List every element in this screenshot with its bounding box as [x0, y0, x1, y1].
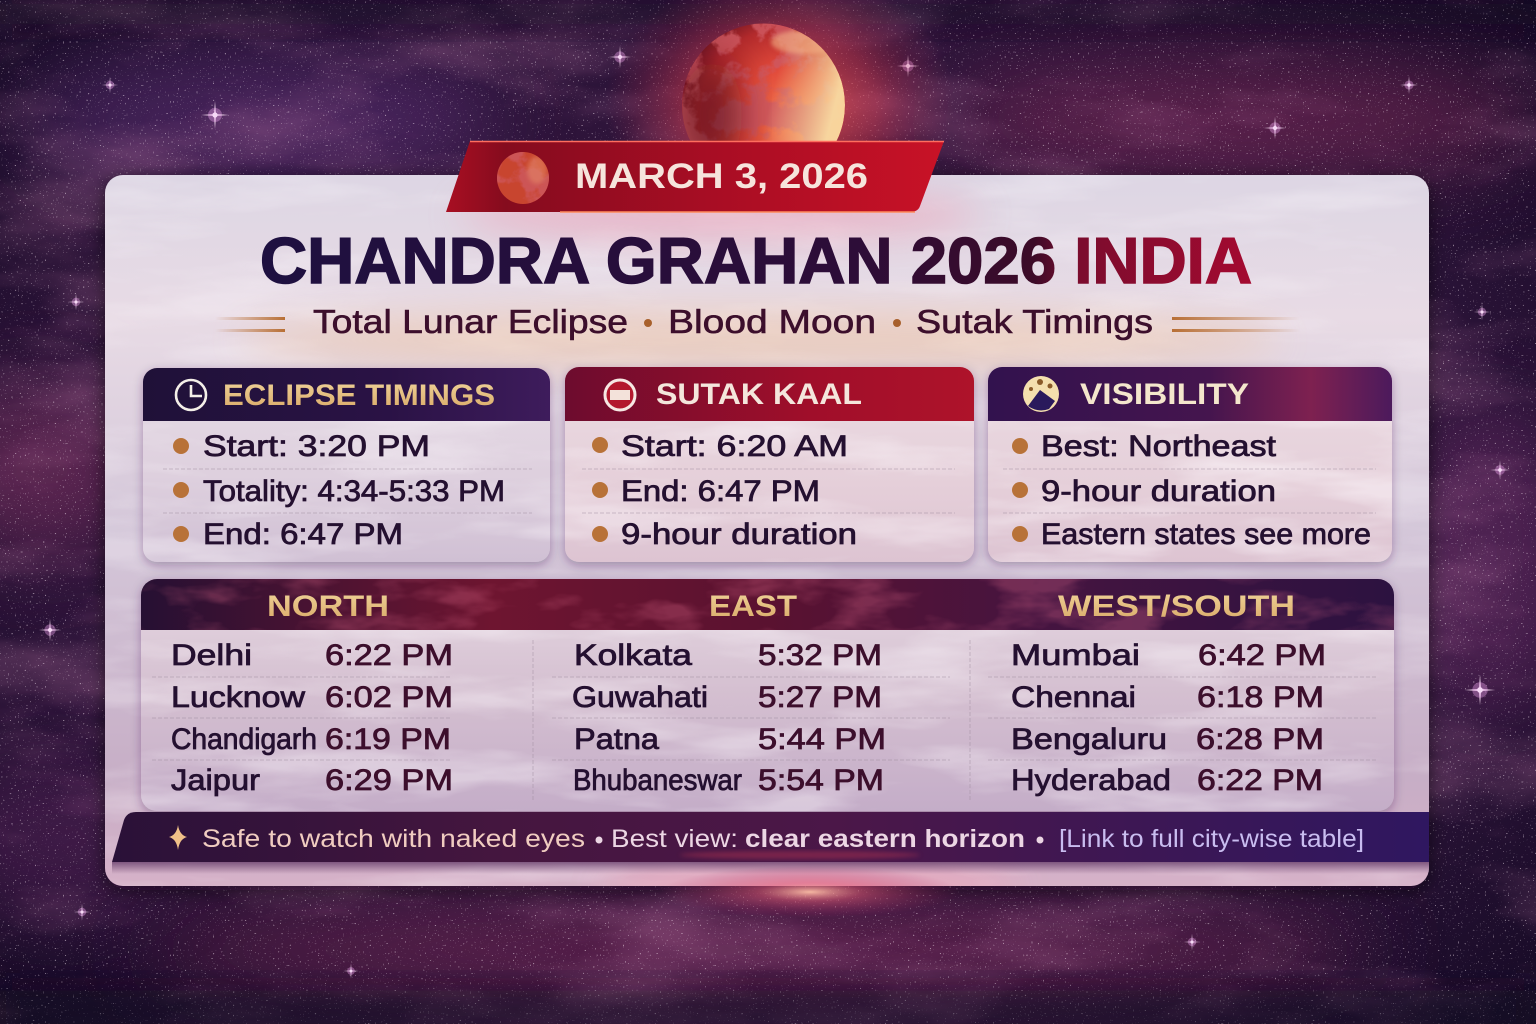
column: north: Lucknow [171, 681, 305, 714]
panel: sutak kaal: Start: 6:20 AM [621, 430, 848, 463]
subtitle: Total Lunar Eclipse [313, 303, 628, 340]
main panel [105, 175, 1429, 902]
panel: visibility: Best: Northeast [1041, 430, 1277, 463]
panel: visibility: Eastern states see more [1041, 518, 1371, 551]
footer note text: clear eastern horizon [745, 825, 1025, 853]
column: east: 5:44 PM [758, 723, 886, 756]
date ribbon [446, 141, 944, 212]
column: north: 6:22 PM [325, 639, 453, 672]
column: west/south: 6:42 PM [1198, 639, 1326, 672]
panel: city timings table [141, 579, 1394, 811]
subtitle: Sutak Timings [916, 303, 1153, 340]
panel: sutak kaal [565, 367, 974, 562]
panel: visibility: 9-hour duration [1041, 475, 1276, 508]
icon: clock [176, 380, 206, 410]
column: north: NORTH [267, 590, 389, 623]
bottom glow under panel [660, 866, 960, 918]
column: north: 6:02 PM [325, 681, 453, 714]
footer note text: Safe to watch with naked eyes [202, 825, 585, 853]
column: north: Jaipur [171, 764, 260, 797]
column: west/south: Hyderabad [1011, 764, 1171, 797]
column: east: 5:54 PM [758, 764, 884, 797]
column: north [171, 590, 453, 797]
heading: visibility: VISIBILITY [1080, 378, 1249, 411]
panel: eclipse timings: Totality: 4:34-5:33 PM [203, 475, 505, 508]
column: west/south: 6:28 PM [1196, 723, 1324, 756]
moon glow [605, 0, 955, 245]
panel: eclipse timings [143, 368, 550, 562]
subtitle [215, 303, 1300, 340]
icon: blood moon [682, 24, 845, 141]
panel: eclipse timings: Start: 3:20 PM [203, 430, 430, 463]
panel: sutak kaal: End: 6:47 PM [621, 475, 820, 508]
subtitle: Blood Moon [668, 303, 876, 340]
heading: eclipse timings: ECLIPSE TIMINGS [223, 379, 495, 412]
column: west/south: Mumbai [1011, 639, 1140, 672]
icon: no entry [605, 380, 635, 410]
column: east [572, 590, 886, 797]
title: CHANDRA GRAHAN 2026 INDIA [260, 224, 1252, 297]
panel: eclipse timings: End: 6:47 PM [203, 518, 403, 551]
ribbon date text: MARCH 3, 2026 [575, 157, 868, 196]
footer note text: Best view: [611, 825, 738, 853]
column: west/south [1011, 590, 1326, 797]
panel: sutak kaal: 9-hour duration [621, 518, 857, 551]
icon: moon over hills [1023, 376, 1059, 412]
column: east: EAST [709, 590, 797, 623]
panel: visibility [988, 367, 1392, 562]
column: east: Patna [574, 723, 659, 756]
column: north: 6:19 PM [325, 723, 451, 756]
column: west/south: 6:22 PM [1197, 764, 1323, 797]
column: east: Guwahati [572, 681, 708, 714]
icon: small moon [497, 152, 549, 204]
column: north: Delhi [171, 639, 252, 672]
heading: sutak kaal: SUTAK KAAL [656, 378, 862, 411]
column: west/south: WEST/SOUTH [1058, 590, 1295, 623]
column: west/south: 6:18 PM [1197, 681, 1324, 714]
column: north: Chandigarh [171, 723, 317, 756]
column: east: 5:27 PM [758, 681, 882, 714]
column: west/south: Bengaluru [1011, 723, 1167, 756]
column: east: Bhubaneswar [573, 764, 742, 797]
column: east: Kolkata [574, 639, 692, 672]
column: west/south: Chennai [1011, 681, 1136, 714]
column: east: 5:32 PM [758, 639, 882, 672]
column: north: 6:29 PM [325, 764, 453, 797]
footer band [112, 812, 1429, 862]
footer note text [202, 825, 1364, 853]
icon: sparkle [169, 825, 187, 850]
footer note text: [Link to full city-wise table] [1059, 825, 1364, 853]
